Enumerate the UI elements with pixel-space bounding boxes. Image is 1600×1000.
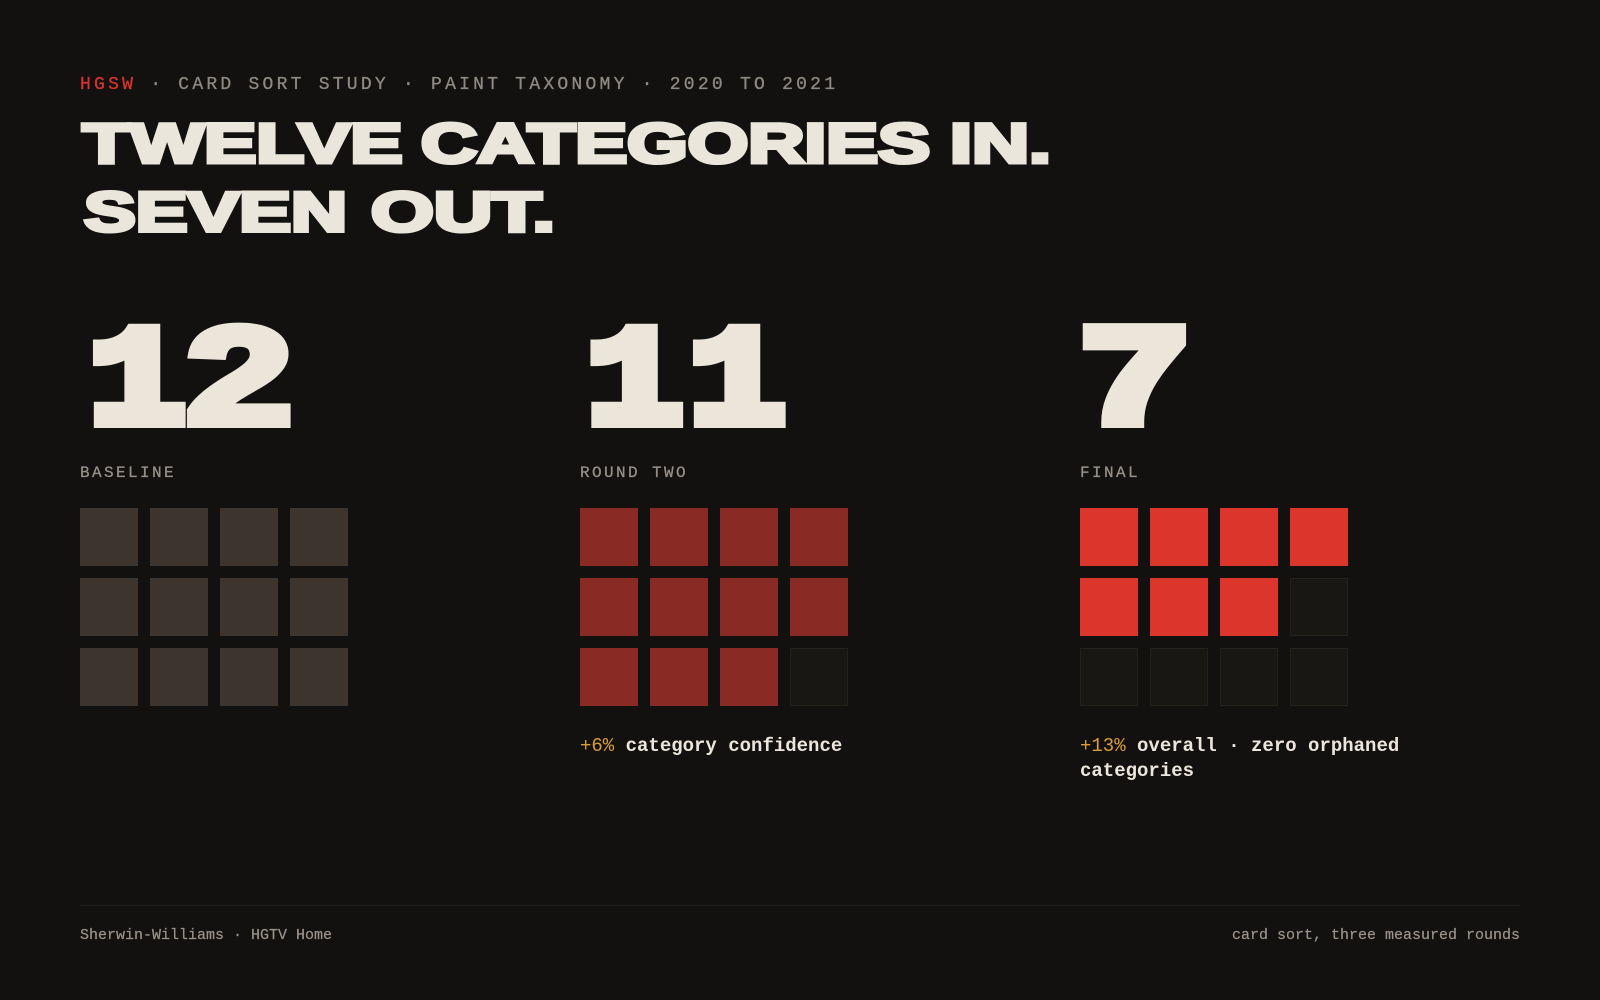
title: SEVEN [84, 180, 347, 243]
number: 12: 2 [186, 300, 292, 454]
grid: 12 of 12 neutral squares [80, 508, 348, 706]
panel: round two [580, 306, 848, 757]
caption: overall gain: +13% overall · zero orphaned [1080, 735, 1399, 757]
number: 12 [89, 300, 292, 465]
caption: overall gain: categories [1080, 760, 1194, 782]
panel: final [1080, 300, 1399, 782]
panel: baseline [80, 300, 348, 706]
caption: category confidence: +6% category confidence [580, 735, 842, 757]
eyebrow: HGSW · CARD SORT STUDY · PAINT TAXONOMY · 2020 TO 2021 [80, 75, 838, 95]
number: 11: 1 [689, 306, 786, 465]
title: IN. [950, 112, 1051, 174]
number: 12: 1 [89, 306, 186, 465]
footer left: Sherwin-Williams · HGTV Home [80, 927, 332, 944]
label: baseline: BASELINE [80, 464, 176, 482]
label: final: FINAL [1080, 464, 1140, 482]
title [82, 112, 1051, 243]
title: OUT. [371, 180, 555, 243]
grid: 7 of 12 red squares [1080, 508, 1348, 706]
label: round two: ROUND TWO [580, 464, 688, 482]
title: CATEGORIES [421, 112, 930, 174]
number: 7: 7 [1083, 300, 1186, 451]
footer right: card sort, three measured rounds [1232, 927, 1520, 944]
number: 11 [586, 306, 786, 465]
number: 11: 1 [586, 306, 683, 465]
title: TWELVE [82, 112, 402, 174]
grid: 11 of 12 dark red squares [580, 508, 848, 706]
